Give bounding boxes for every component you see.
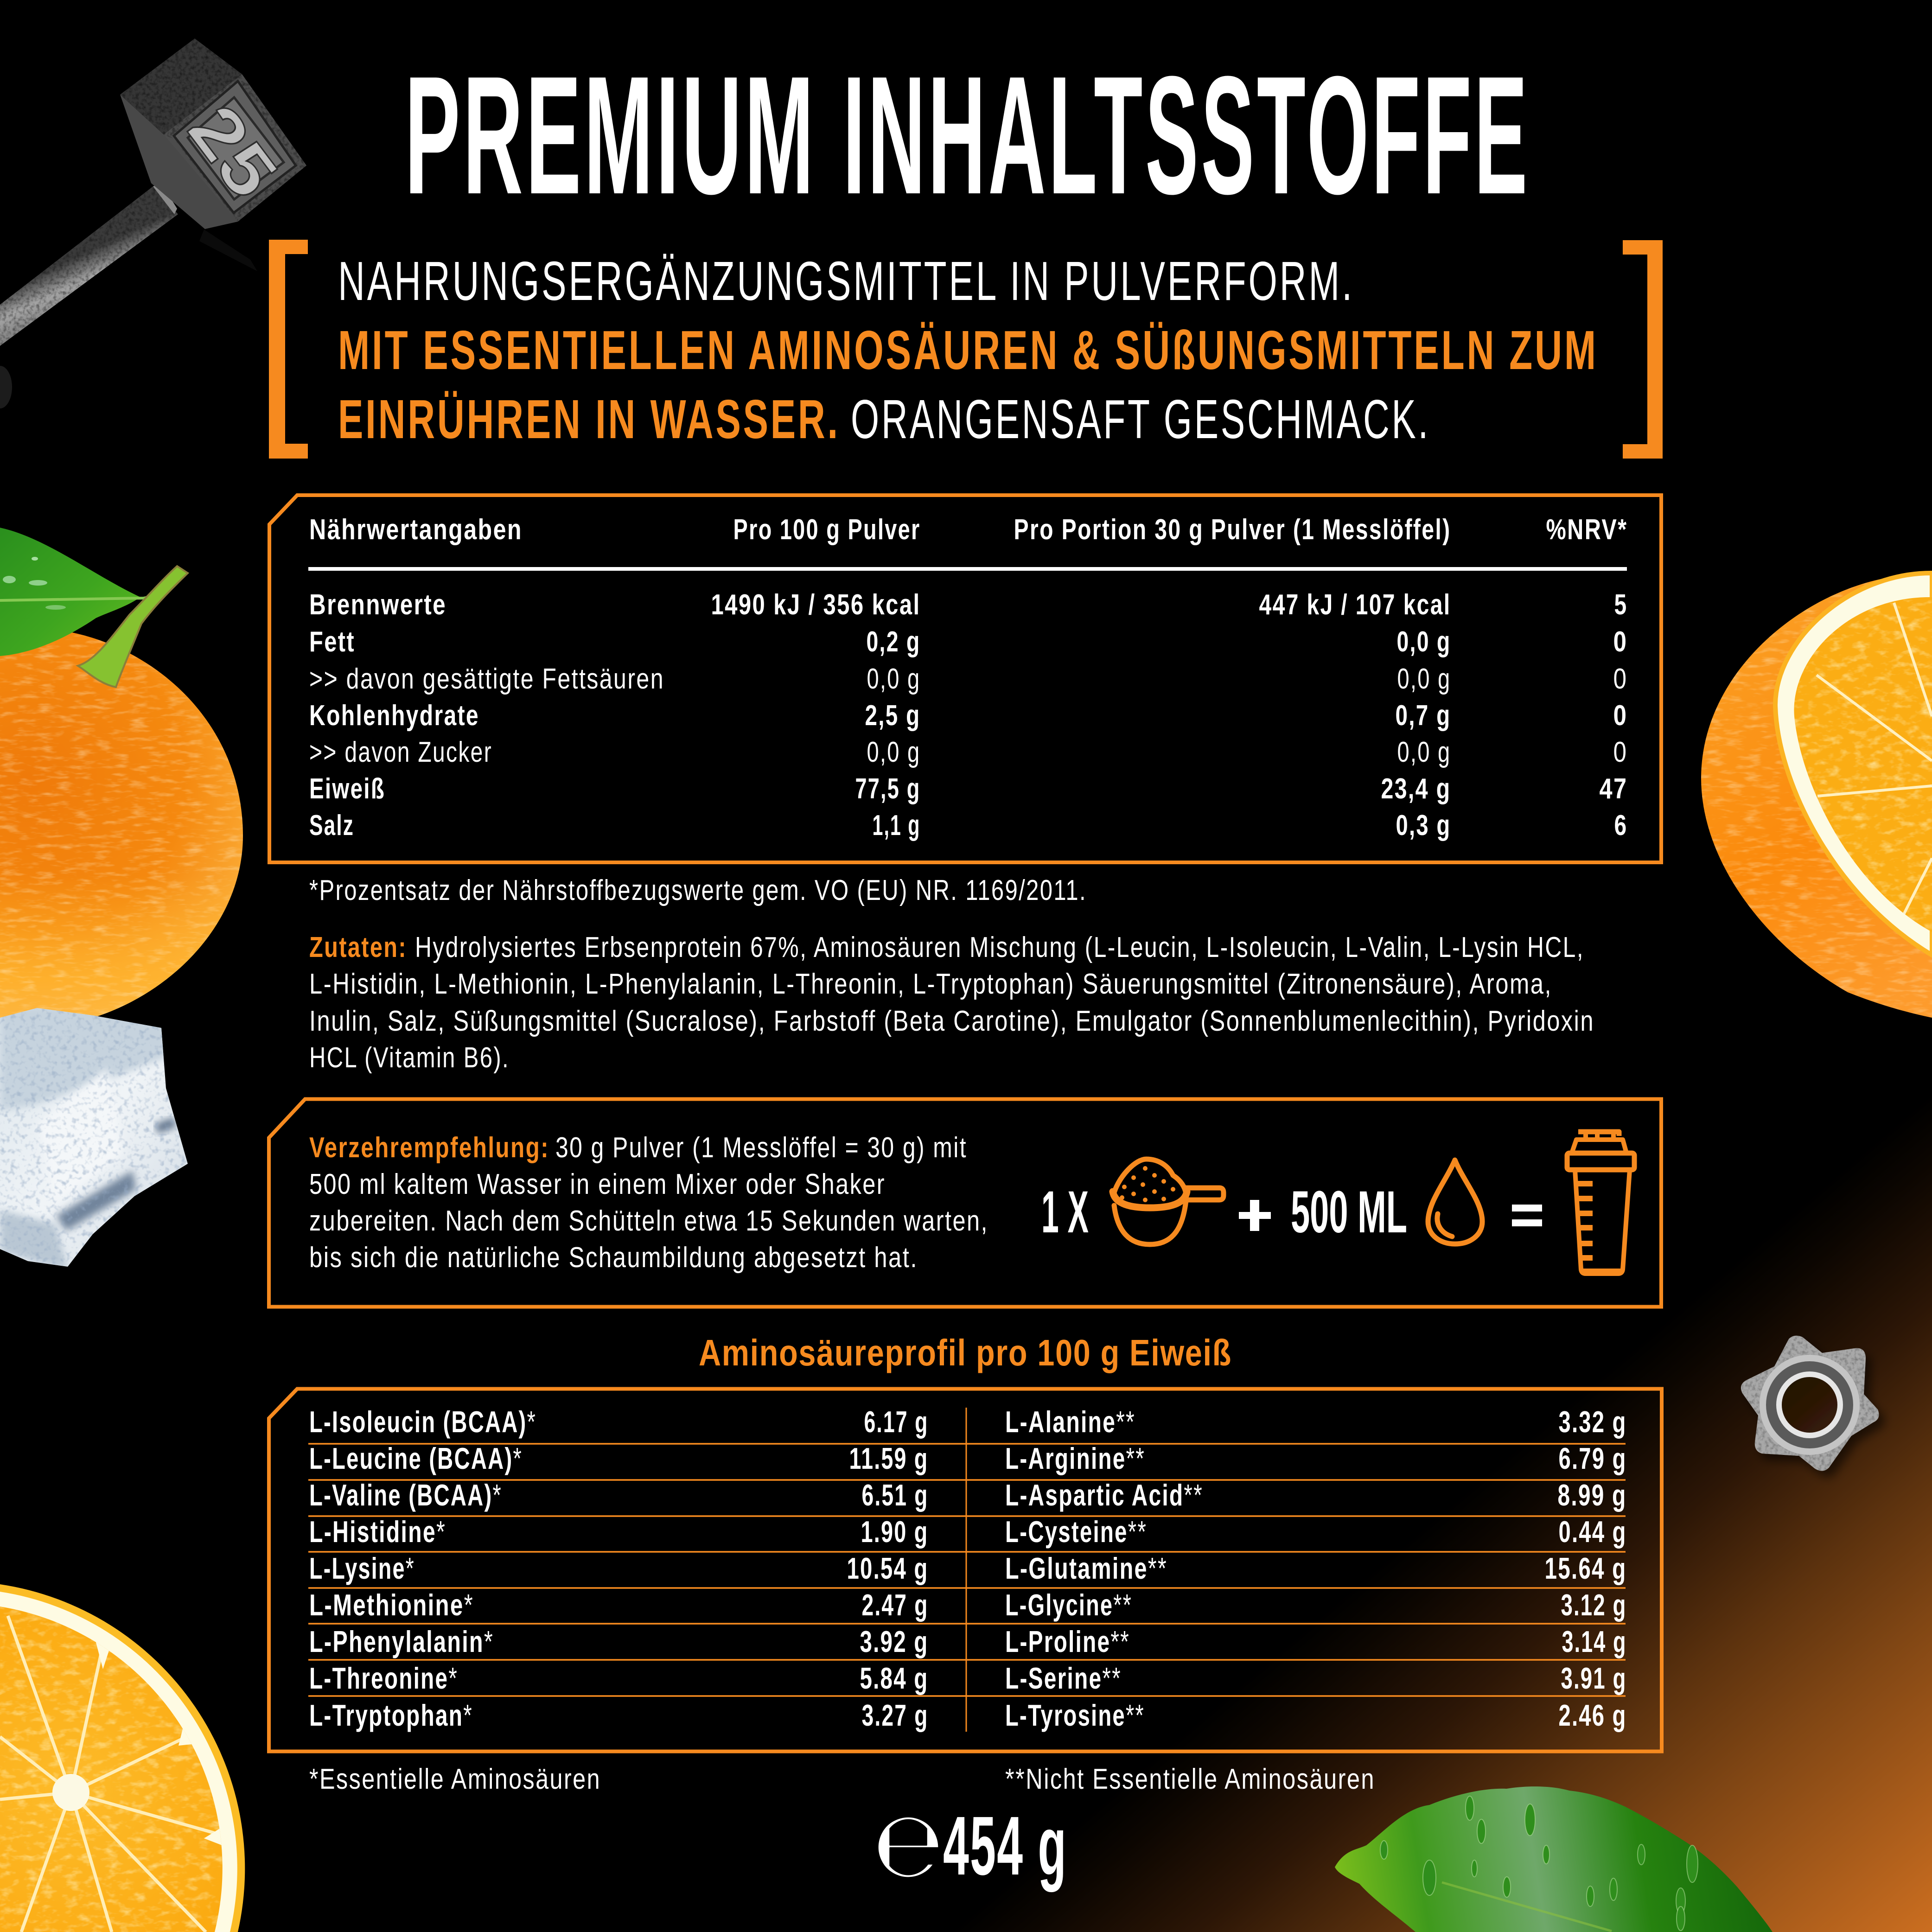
column: non-essential amino acids: L-Cysteine** [1005, 1515, 1147, 1549]
row: Fett: 0,0 g [1396, 626, 1451, 658]
plus sign [1239, 1200, 1271, 1231]
usage text: 30 g Pulver (1 Messlöffel = 30 g) mit [555, 1132, 967, 1164]
table header: Pro Portion 30 g Pulver (1 Messlöffel) [1014, 514, 1451, 546]
row: Brennwerte: 447 kJ / 107 kcal [1259, 589, 1451, 621]
row: gesättigte Fettsäuren: 0,0 g [867, 663, 921, 695]
column: essential amino acids: L-Phenylalanin* [309, 1625, 494, 1658]
bracket right [1623, 240, 1663, 459]
footnote NRV: *Prozentsatz der Nährstoffbezugswerte gem. VO (EU) NR. 1169/2011. [309, 874, 1087, 906]
column: non-essential amino acids: L-Serine** [1005, 1661, 1122, 1695]
label: 500 ML: 500 ML [1291, 1179, 1407, 1245]
row: Eiweiß: 47 [1600, 773, 1627, 805]
column: essential amino acids: L-Valine (BCAA)* [309, 1478, 502, 1512]
panel: nutrition table [269, 495, 1661, 862]
row: Eiweiß: 23,4 g [1381, 773, 1451, 805]
column: non-essential amino acids: L-Arginine** [1005, 1441, 1145, 1475]
column: non-essential amino acids: 3.14 g [1562, 1625, 1626, 1658]
photo: dumbbell [0, 38, 306, 408]
column: non-essential amino acids [1005, 1405, 1626, 1732]
row: Salz [309, 810, 1627, 842]
row: Zucker: 0,0 g [1397, 736, 1451, 768]
column: non-essential amino acids: L-Proline** [1005, 1625, 1130, 1658]
photo: orange slice bottom left [0, 1584, 245, 1932]
usage text: zubereiten. Nach dem Schütteln etwa 15 Sekunden warten, [309, 1205, 988, 1237]
column: non-essential amino acids: 3.32 g [1559, 1405, 1626, 1439]
row: Fett: 0,2 g [866, 626, 921, 658]
column: non-essential amino acids: 0.44 g [1559, 1515, 1626, 1549]
photo: halved orange right [1701, 573, 1932, 1018]
photo: ice cube [0, 1006, 190, 1270]
row: Zucker: 0 [1613, 736, 1627, 768]
column: essential amino acids: 1.90 g [861, 1515, 928, 1549]
row: Eiweiß [309, 773, 1627, 805]
icon: shaker [1567, 1132, 1634, 1274]
column: non-essential amino acids: 2.46 g [1559, 1698, 1626, 1732]
column: essential amino acids: L-Leucine (BCAA)* [309, 1441, 523, 1475]
column: essential amino acids: 6.17 g [864, 1405, 928, 1439]
column: non-essential amino acids: L-Aspartic Acid** [1005, 1478, 1203, 1512]
column: non-essential amino acids: 8.99 g [1558, 1478, 1626, 1512]
row: Kohlenhydrate: 0 [1613, 700, 1627, 732]
column: essential amino acids: 10.54 g [847, 1551, 928, 1585]
usage text [309, 1132, 988, 1274]
photo: green leaf bottom right [1335, 1786, 1773, 1932]
table header: Nährwertangaben [309, 514, 523, 546]
row: Eiweiß: Eiweiß [309, 773, 385, 805]
row: gesättigte Fettsäuren: 0 [1613, 663, 1627, 695]
row: Salz: 1,1 g [873, 810, 921, 842]
equals sign [1512, 1205, 1542, 1226]
column: non-essential amino acids: L-Tyrosine** [1005, 1698, 1145, 1732]
panel: recommended use [269, 1099, 1661, 1307]
net weight: ℮ [874, 1792, 943, 1897]
leaf [0, 528, 148, 656]
ingredients text [309, 931, 1594, 1074]
column: non-essential amino acids: L-Glycine** [1005, 1588, 1132, 1622]
net weight [874, 1792, 1067, 1897]
title: PREMIUM [405, 41, 816, 229]
photo: spinlock nut [1741, 1336, 1879, 1471]
row: Brennwerte: 5 [1614, 589, 1627, 621]
panel: amino acid table [269, 1389, 1662, 1752]
column: non-essential amino acids: 3.12 g [1561, 1588, 1626, 1622]
column: essential amino acids: L-Lysine* [309, 1551, 415, 1585]
ingredients text: HCL (Vitamin B6). [309, 1042, 510, 1074]
column: essential amino acids: L-Tryptophan* [309, 1698, 473, 1732]
row: Fett: 0 [1613, 626, 1627, 658]
column: essential amino acids: 3.27 g [861, 1698, 928, 1732]
icon: scoop [1113, 1159, 1224, 1244]
row: Salz: 0,3 g [1396, 810, 1451, 842]
row: Kohlenhydrate: 2,5 g [865, 700, 921, 732]
row: Zucker: 0,0 g [867, 736, 921, 768]
row: Fett: Fett [309, 626, 355, 658]
column: essential amino acids: L-Methionine* [309, 1588, 474, 1622]
orange cut face [1775, 573, 1932, 955]
table header [309, 514, 1627, 546]
column: non-essential amino acids: 3.91 g [1561, 1661, 1626, 1695]
intro text: ORANGENSAFT GESCHMACK. [851, 389, 1430, 450]
column: essential amino acids: L-Histidine* [309, 1515, 446, 1549]
row: Zucker: >> davon Zucker [309, 736, 492, 768]
icon: water drop [1428, 1160, 1482, 1244]
column: essential amino acids: L-Threonine* [309, 1661, 458, 1695]
row: gesättigte Fettsäuren: 0,0 g [1397, 663, 1451, 695]
ingredients text: Hydrolysiertes Erbsenprotein 67%, Aminosäuren Mischung (L-Leucin, L-Isoleucin, L-Valin, L-Lysin HCL, [415, 931, 1584, 963]
column: non-essential amino acids: L-Glutamine** [1005, 1551, 1167, 1585]
row: Eiweiß: 77,5 g [855, 773, 921, 805]
row: Kohlenhydrate: 0,7 g [1396, 700, 1451, 732]
column: non-essential amino acids: 6.79 g [1559, 1441, 1626, 1475]
table header: Pro 100 g Pulver [733, 514, 921, 546]
label: 1 X: 1 X [1041, 1179, 1089, 1245]
bracket left [269, 240, 308, 459]
column: essential amino acids: L-Isoleucin (BCAA)* [309, 1405, 536, 1439]
intro text [338, 250, 1598, 450]
row: Zucker [309, 736, 1627, 768]
intro text: EINRÜHREN IN WASSER. [338, 389, 840, 450]
row: gesättigte Fettsäuren: >> davon gesättigte Fettsäuren [309, 663, 664, 695]
row: Salz: 6 [1614, 810, 1627, 842]
column: essential amino acids: 6.51 g [861, 1478, 928, 1512]
column: essential amino acids: 2.47 g [861, 1588, 928, 1622]
column: essential amino acids [309, 1405, 928, 1732]
net weight: 454 g [943, 1799, 1067, 1893]
column: non-essential amino acids: 15.64 g [1545, 1551, 1626, 1585]
column: essential amino acids: 5.84 g [860, 1661, 928, 1695]
heading: amino acid profile: Aminosäureprofil pro 100 g Eiweiß [699, 1332, 1232, 1373]
ingredients text: Zutaten: [309, 931, 407, 963]
dumbbell number: 25 [173, 90, 293, 212]
column: essential amino acids: 11.59 g [849, 1441, 928, 1475]
photo: whole orange with leaf [0, 528, 243, 1027]
row: gesättigte Fettsäuren [309, 663, 1627, 695]
row: Brennwerte [309, 589, 1627, 621]
row: Kohlenhydrate: Kohlenhydrate [309, 700, 479, 732]
stem [78, 566, 188, 687]
usage text: 500 ml kaltem Wasser in einem Mixer oder Shaker [309, 1168, 886, 1200]
row: Brennwerte: 1490 kJ / 356 kcal [711, 589, 921, 621]
table header: %NRV* [1546, 514, 1627, 546]
row: Brennwerte: Brennwerte [309, 589, 446, 621]
footnote essential: *Essentielle Aminosäuren [309, 1763, 601, 1795]
usage text: bis sich die natürliche Schaumbildung abgesetzt hat. [309, 1242, 918, 1274]
ingredients text: L-Histidin, L-Methionin, L-Phenylalanin, L-Threonin, L-Tryptophan) Säuerungsmittel (Zitronensäure), Aroma, [309, 968, 1552, 1000]
footnote non-essential: **Nicht Essentielle Aminosäuren [1005, 1763, 1375, 1795]
usage text: Verzehrempfehlung: [309, 1132, 549, 1164]
ingredients text: Inulin, Salz, Süßungsmittel (Sucralose), Farbstoff (Beta Carotine), Emulgator (Sonnenblumenlecithin), Pyridoxin [309, 1005, 1594, 1037]
intro text: NAHRUNGSERGÄNZUNGSMITTEL IN PULVERFORM. [338, 250, 1354, 312]
column: non-essential amino acids: L-Alanine** [1005, 1405, 1135, 1439]
row: Kohlenhydrate [309, 700, 1627, 732]
row: Salz: Salz [309, 810, 354, 842]
column: essential amino acids: 3.92 g [860, 1625, 928, 1658]
row: Fett [309, 626, 1627, 658]
